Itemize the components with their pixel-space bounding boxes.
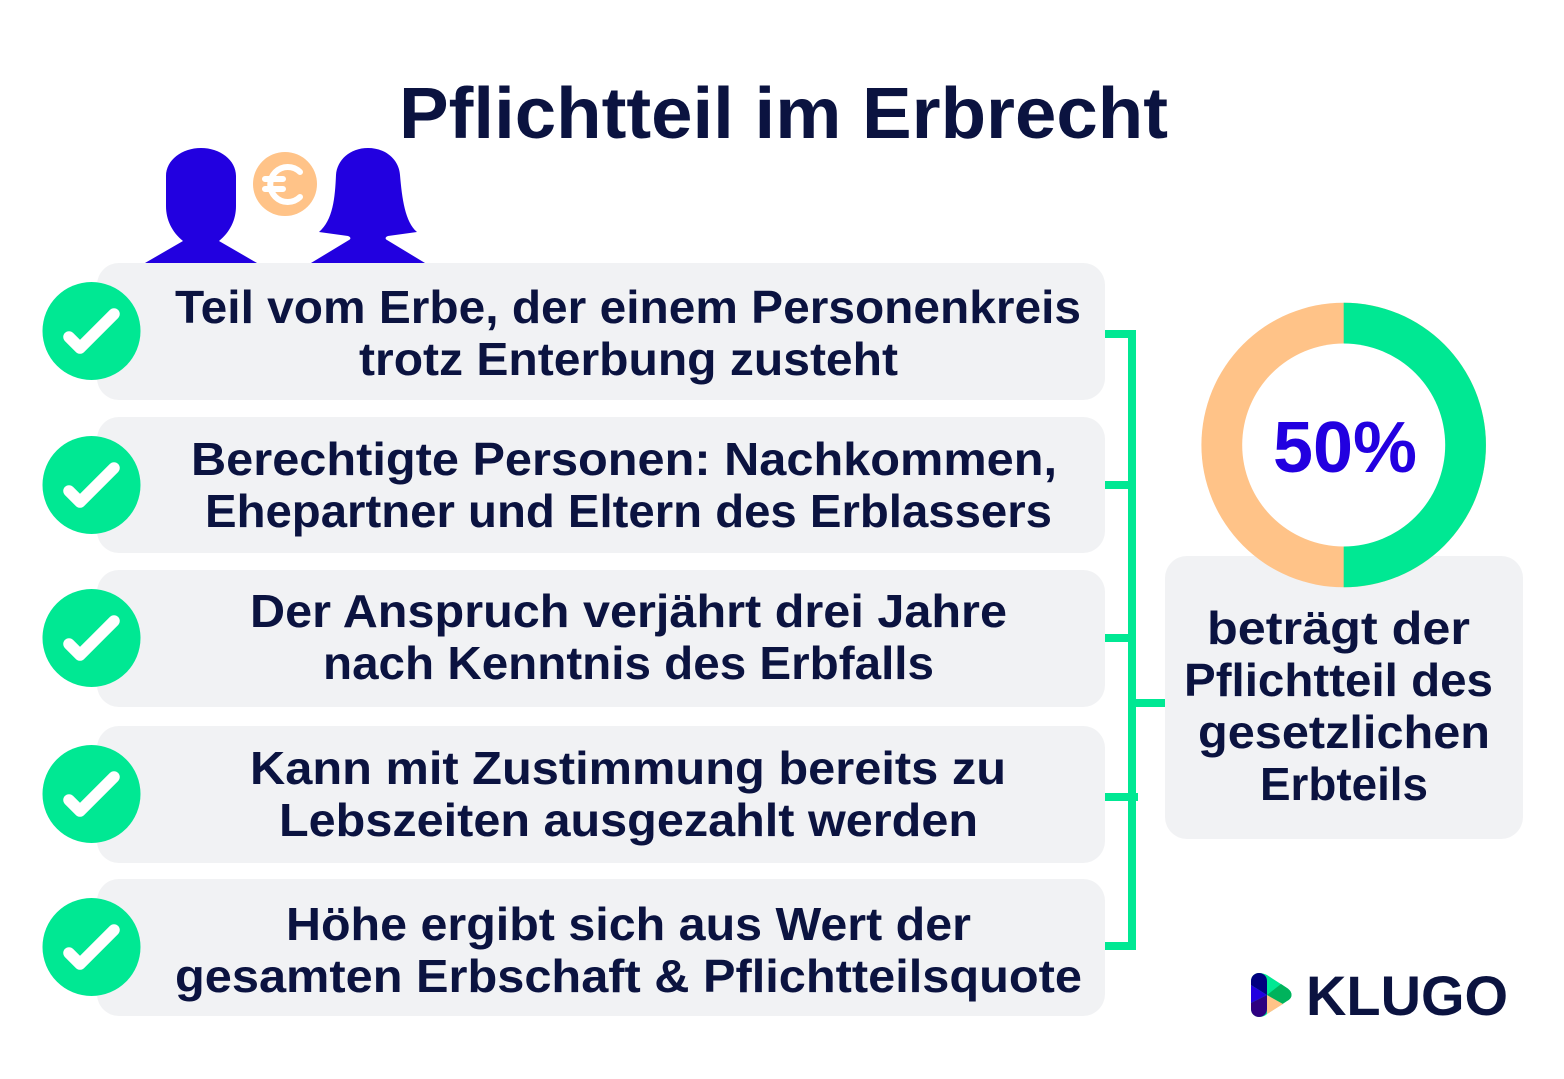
icon: check 1 [42,282,140,380]
text: item 2: Ehepartner und Eltern des Erblassers [205,485,1052,537]
panel: item 2 [42,417,1105,553]
text: item 3 [250,585,1007,689]
text: item 4 [250,742,1006,846]
text: item 5 [175,898,1082,1002]
text: explanation: Pflichtteil des [1184,654,1493,706]
text: item 3: nach Kenntnis des Erbfalls [323,637,934,689]
icon: euro coin [253,152,317,216]
text: item 1: trotz Enterbung zusteht [359,333,898,385]
text: item 3: Der Anspruch verjährt drei Jahre [250,585,1007,637]
text: item 4: Kann mit Zustimmung bereits zu [250,742,1006,794]
donut chart: 50 percent [1201,303,1486,587]
text: explanation: beträgt der [1207,602,1470,654]
connector bracket [1105,334,1165,946]
icon: man silhouette [145,148,257,263]
logo: KLUGO [1251,964,1508,1027]
text: explanation [1184,602,1493,810]
text: item 1 [175,281,1081,385]
text: KLUGO wordmark: KLUGO [1306,964,1508,1027]
text: item 1: Teil vom Erbe, der einem Personenkreis [175,281,1081,333]
text: item 2: Berechtigte Personen: Nachkommen, [191,433,1057,485]
text: item 2 [191,433,1057,537]
text: explanation: gesetzlichen [1198,706,1490,758]
title: Pflichtteil im Erbrecht [399,74,1168,154]
icon: logo play mark [1251,973,1292,1017]
text: item 5: Höhe ergibt sich aus Wert der [286,898,971,950]
icon: check 3 [42,589,140,687]
panel: item 1 [42,263,1105,400]
panel: 50 percent explanation [1165,556,1523,839]
text: item 5: gesamten Erbschaft & Pflichtteilsquote [175,950,1082,1002]
icon: check 2 [42,436,140,534]
icon: check 4 [42,745,140,843]
label: 50%: 50% [1273,408,1417,488]
icon: woman silhouette [311,148,425,263]
icon: check 5 [42,898,140,996]
text: explanation: Erbteils [1260,758,1428,810]
text: item 4: Lebszeiten ausgezahlt werden [279,794,978,846]
panel: item 5 [42,879,1105,1016]
panel: item 3 [42,570,1105,707]
panel: item 4 [42,726,1105,863]
